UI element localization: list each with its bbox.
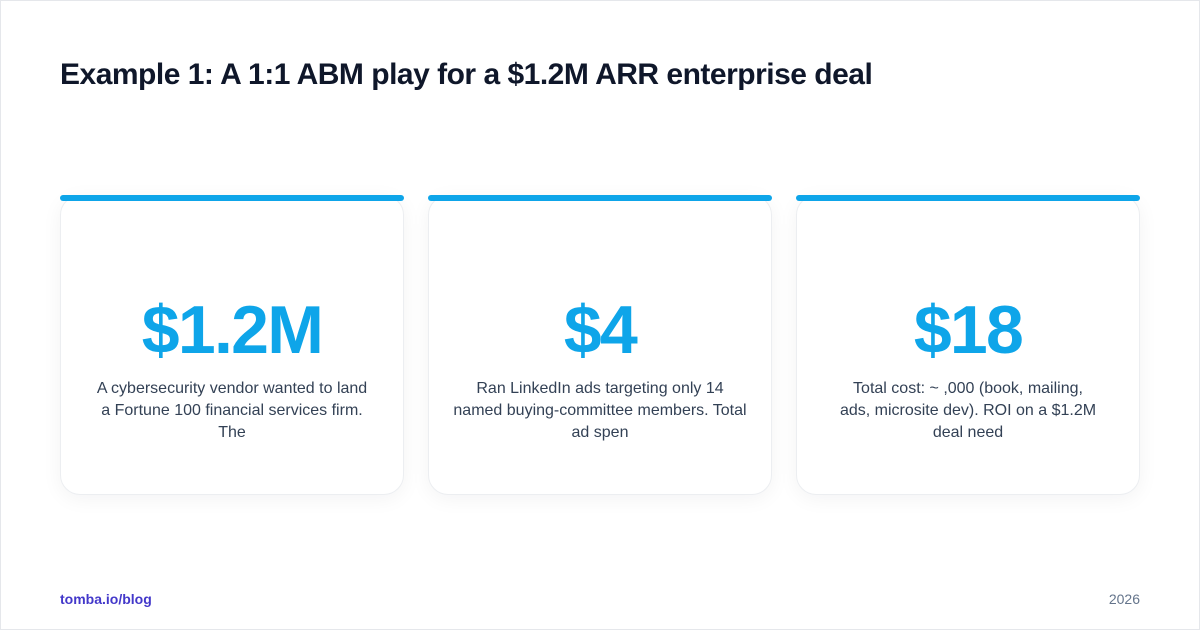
card 2 accent bar	[428, 195, 772, 201]
title: Example 1: A 1:1 ABM play for a $1.2M ARR enterprise deal	[60, 58, 872, 91]
panel: stat card 3	[796, 195, 1140, 495]
card 1 description: A cybersecurity vendor wanted to land	[97, 380, 367, 397]
card 3 description: Total cost: ~ ,000 (book, mailing,	[853, 380, 1083, 397]
footer year: 2026	[1109, 591, 1140, 607]
card 3 description: ads, microsite dev). ROI on a $1.2M	[840, 402, 1096, 419]
card 2 description	[453, 380, 747, 441]
card 3 accent bar	[796, 195, 1140, 201]
card 2 description: named buying-committee members. Total	[453, 402, 747, 419]
card 2 big number: $4	[564, 292, 636, 368]
card 3 big number: $18	[914, 292, 1022, 368]
card 3 description: deal need	[933, 424, 1003, 441]
card 1 description	[97, 380, 367, 441]
panel: stat card 1	[60, 195, 404, 495]
card 2 description: Ran LinkedIn ads targeting only 14	[476, 380, 724, 397]
panel: stat card 2	[428, 195, 772, 495]
footer brand: tomba.io/blog	[60, 591, 152, 607]
card 1 description: a Fortune 100 financial services firm.	[101, 402, 363, 419]
card 1 accent bar	[60, 195, 404, 201]
card 1 big number: $1.2M	[142, 292, 322, 368]
card 1 description: The	[218, 424, 246, 441]
card 3 description	[840, 380, 1096, 441]
card 2 description: ad spen	[572, 424, 628, 441]
